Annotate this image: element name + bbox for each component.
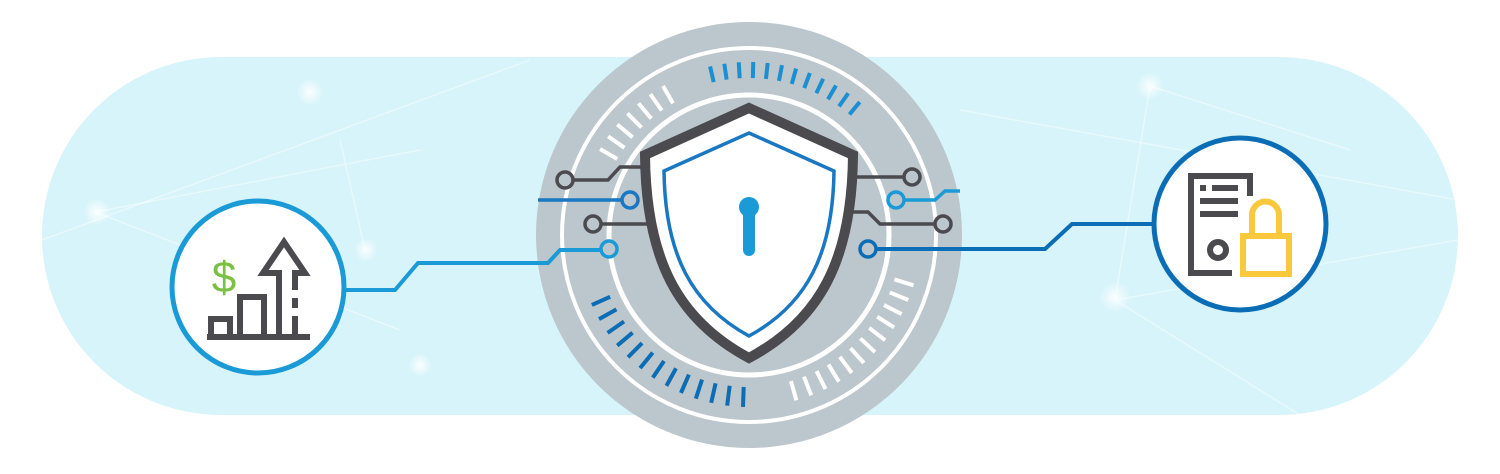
central badge — [536, 22, 962, 448]
ticks lower-right white — [791, 279, 913, 400]
circuit traces left — [538, 167, 650, 257]
icon: document with lock — [1154, 138, 1326, 310]
connector right — [876, 224, 1154, 249]
shield — [645, 108, 853, 358]
icon: growth chart: $ — [212, 253, 236, 302]
ticks top blue — [710, 62, 860, 114]
circuit traces right — [850, 169, 960, 257]
background pill — [42, 57, 1458, 415]
ticks lower-left blue — [592, 297, 744, 407]
connector left — [345, 250, 601, 290]
keyhole — [739, 197, 759, 256]
icon: growth chart — [172, 201, 344, 373]
ticks upper-left white — [600, 86, 673, 159]
